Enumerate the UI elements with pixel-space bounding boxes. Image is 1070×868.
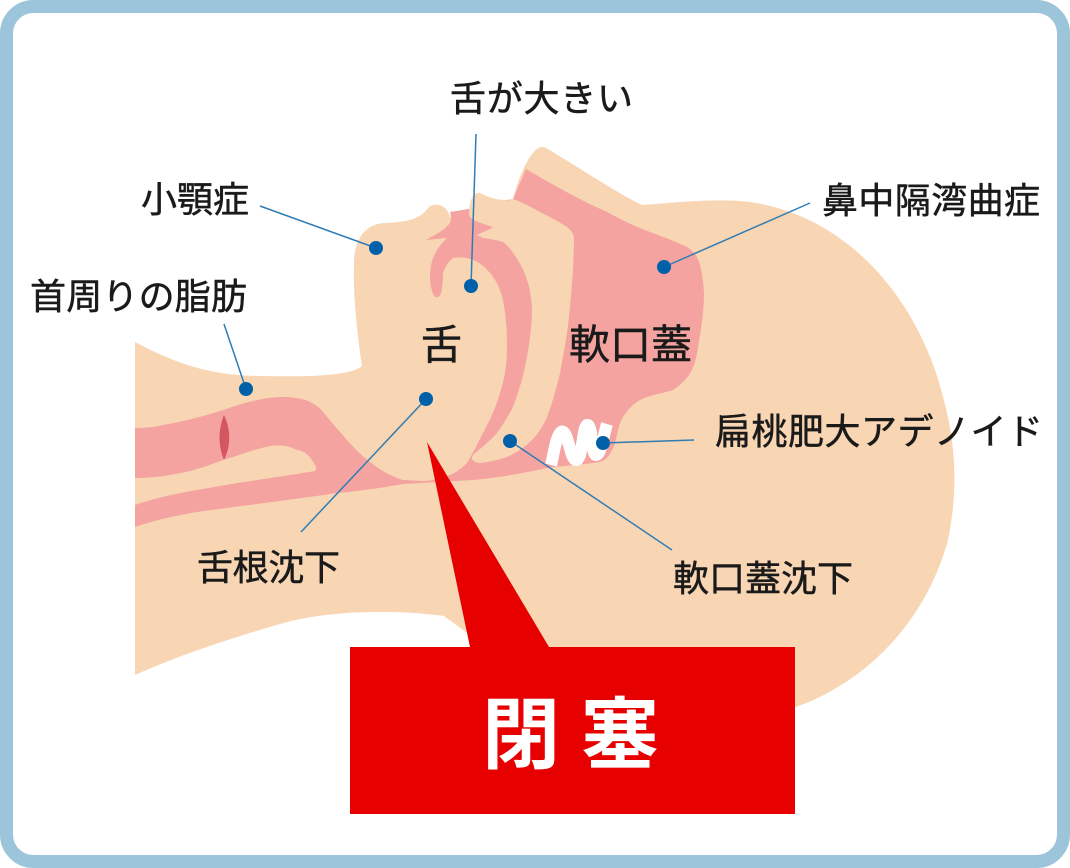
label: tonsils and adenoids: 扁桃肥大アデノイド xyxy=(715,411,1043,452)
head and neck silhouette xyxy=(135,147,954,712)
label: tongue base drop: 舌根沈下 xyxy=(197,547,340,588)
label: soft palate: 軟口蓋 xyxy=(569,322,692,368)
callout: obstruction xyxy=(350,442,795,814)
marker dots xyxy=(239,241,671,450)
nasal cavity and soft palate airway xyxy=(135,169,704,527)
tonsil adenoid xyxy=(551,424,607,465)
callout: obstruction: 閉 xyxy=(482,691,560,779)
label: deviated septum: 鼻中隔湾曲症 xyxy=(822,180,1040,221)
leader lines xyxy=(224,134,810,550)
palate and upper jaw xyxy=(469,193,574,463)
label: tongue: 舌 xyxy=(421,322,462,368)
label: small jaw: 小顎症 xyxy=(141,179,249,220)
label: soft palate drop: 軟口蓋沈下 xyxy=(673,558,853,599)
head cross-section illustration xyxy=(135,147,954,712)
label: neck fat: 首周りの脂肪 xyxy=(30,276,247,317)
label: large tongue: 舌が大きい xyxy=(450,78,633,119)
larynx xyxy=(220,415,229,460)
callout: obstruction: 塞 xyxy=(581,691,659,779)
